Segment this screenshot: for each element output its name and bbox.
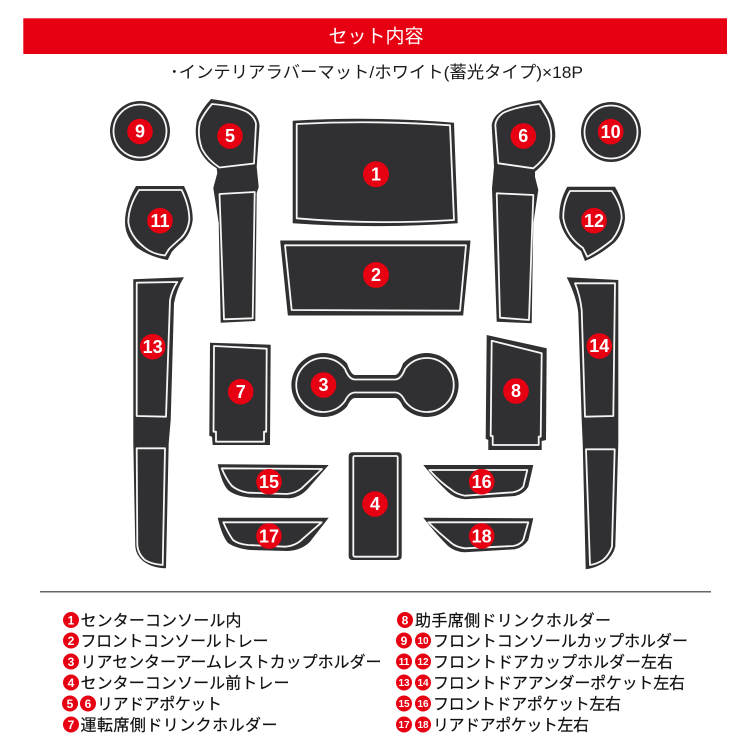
legend item 9 10: フロントコンソールカップホルダー (433, 632, 688, 650)
mat 15 (218, 464, 329, 498)
legend item 4: 4 (68, 676, 75, 690)
legend item 11 12: 12 (417, 657, 429, 668)
legend item 7: 7 (68, 718, 75, 732)
mat 4 (349, 452, 402, 560)
mat 14: 14 (589, 336, 609, 356)
legend item 2: フロントコンソールトレー (80, 634, 268, 650)
legend item 11 12: フロントドアカップホルダー左右 (433, 654, 673, 672)
legend item 1: 1 (68, 613, 75, 627)
legend item 13 14: フロントドアアンダーポケット左右 (433, 674, 685, 692)
mat 17 (218, 518, 329, 551)
mat 10: 10 (601, 122, 621, 142)
legend item 9 10: 9 (401, 634, 408, 648)
legend item 15 16: 16 (417, 699, 429, 710)
mat 3: 3 (318, 375, 329, 395)
mat 17: 17 (259, 526, 279, 546)
mat 7: 7 (236, 382, 246, 402)
mat 15: 15 (259, 472, 279, 492)
legend item 1: センターコンソール内 (80, 612, 242, 630)
legend item 15 16: フロントドアポケット左右 (433, 696, 621, 714)
legend item 17 18: 17 (398, 720, 410, 731)
mat 9 (110, 101, 170, 161)
legend item 3: リアセンターアームレストカップホルダー (80, 654, 382, 672)
subtitle: ･インテリアラバーマット/ホワイト(蓄光タイプ)×18P (170, 63, 583, 82)
title banner (23, 18, 727, 54)
mat 6 (492, 100, 555, 323)
mat 5 (196, 99, 260, 323)
legend left column (62, 612, 382, 734)
mat 4: 4 (370, 494, 380, 514)
mat 10 (581, 102, 641, 162)
divider (40, 591, 711, 592)
mat 13: 13 (143, 337, 163, 357)
mat 16: 16 (472, 472, 492, 492)
mat 9: 9 (135, 122, 145, 142)
legend item 7: 運転席側ドリンクホルダー (80, 716, 278, 734)
mat 1: 1 (371, 164, 381, 184)
legend item 13 14: 14 (417, 678, 429, 689)
legend item 8: 8 (402, 613, 409, 627)
mat 2 (281, 241, 470, 315)
legend item 15 16: 15 (398, 699, 410, 710)
mat 12 (559, 187, 625, 261)
legend item 9 10: 10 (417, 636, 429, 647)
mat 7 (209, 343, 271, 445)
legend item 3: 3 (68, 655, 75, 669)
mat 11 (125, 186, 193, 260)
mat 18: 18 (472, 526, 492, 546)
mat 8 (486, 335, 547, 450)
legend item 13 14: 13 (398, 678, 410, 689)
mat 6: 6 (518, 126, 528, 146)
mat 8: 8 (511, 381, 521, 401)
legend item 5 6: 6 (85, 697, 92, 711)
mat 16 (423, 465, 533, 499)
title banner: セット内容 (328, 26, 424, 48)
mat 18 (423, 518, 533, 552)
legend item 8: 助手席側ドリンクホルダー (415, 612, 611, 630)
mat 2: 2 (371, 265, 381, 285)
legend item 4: センターコンソール前トレー (80, 674, 290, 692)
legend item 17 18: 18 (417, 720, 429, 731)
mat 13 (133, 277, 184, 568)
mat 5: 5 (225, 126, 235, 146)
mat 3 (291, 353, 459, 417)
mat 11: 11 (150, 211, 170, 231)
mat 1 (293, 119, 458, 226)
legend item 5 6: リアドアポケット (97, 696, 222, 714)
mat 14 (567, 277, 618, 569)
legend item 17 18: リアドアポケット左右 (433, 716, 589, 734)
legend item 5 6: 5 (67, 697, 74, 711)
legend right column (396, 612, 688, 734)
legend item 2: 2 (68, 634, 75, 648)
legend item 11 12: 11 (399, 657, 410, 668)
mat 12: 12 (584, 211, 604, 231)
